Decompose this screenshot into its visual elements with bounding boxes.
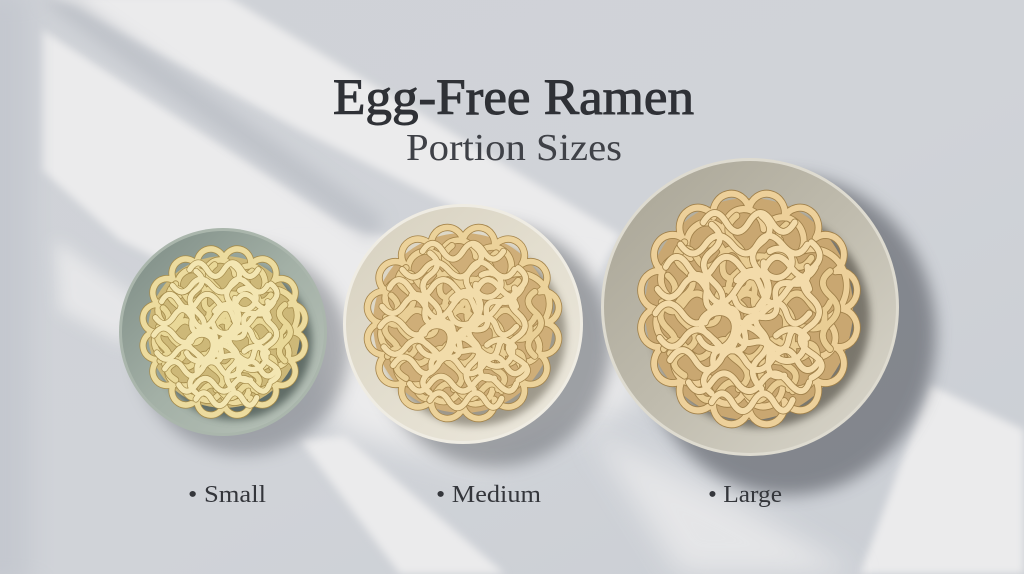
small plate of noodles — [119, 228, 349, 454]
medium plate of noodles — [343, 204, 611, 467]
label: small: • Small — [188, 482, 266, 508]
label: medium: • Medium — [436, 482, 541, 508]
label: large: • Large — [708, 482, 782, 508]
large plate of noodles — [601, 158, 936, 495]
subtitle: Portion Sizes — [406, 127, 622, 169]
title: Egg-Free Ramen — [333, 70, 694, 126]
